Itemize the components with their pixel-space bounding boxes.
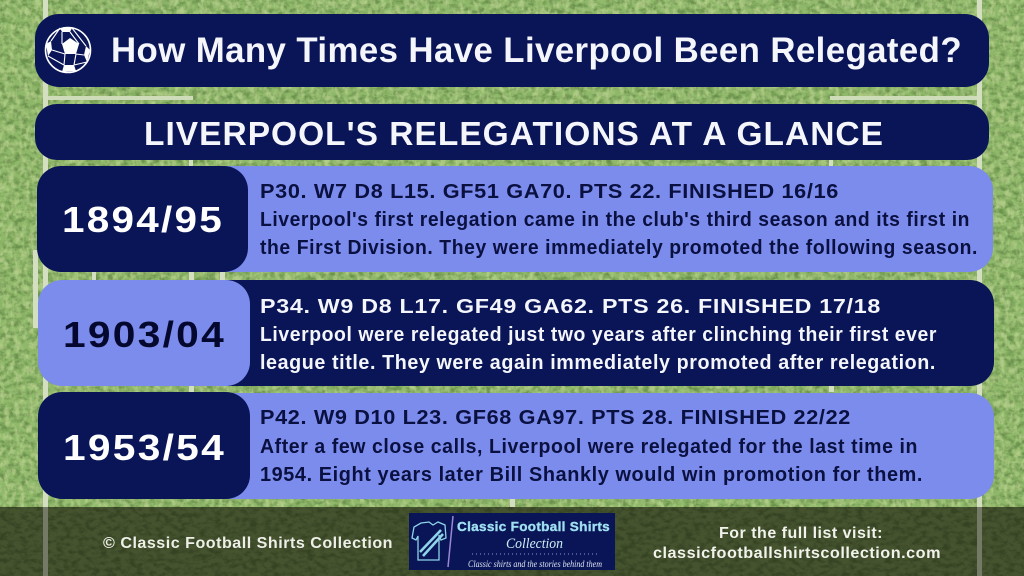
stats and description 1894/95: [260, 181, 978, 259]
stats and description 1894/95: the First Division. They were immediately promoted the following season.: [260, 237, 978, 259]
year box 1894/95: [37, 166, 248, 272]
call to action text: [653, 525, 941, 562]
subtitle text: LIVERPOOL'S RELEGATIONS AT A GLANCE: [144, 115, 884, 152]
stats and description 1903/04: Liverpool were relegated just two years after clinching their first ever: [260, 324, 937, 346]
stats and description 1903/04: league title. They were again immediately promoted after relegation.: [260, 352, 936, 374]
stats and description 1953/54: After a few close calls, Liverpool were relegated for the last time in: [260, 436, 918, 458]
row: 1894/95: [37, 166, 993, 272]
title banner: [35, 14, 989, 87]
year box 1953/54: 1953/54: [63, 427, 226, 468]
logo subtitle: Collection: [506, 536, 563, 552]
call to action text: For the full list visit:: [719, 525, 883, 542]
logo dotted rule: [472, 553, 600, 555]
year box 1953/54: [38, 392, 250, 499]
year box 1903/04: 1903/04: [63, 314, 226, 355]
stats and description 1903/04: [260, 296, 937, 374]
icon: shirt: [412, 522, 446, 560]
stats and description 1894/95: P30. W7 D8 L15. GF51 GA70. PTS 22. FINISHED 16/16: [260, 181, 839, 203]
year box 1894/95: 1894/95: [62, 199, 224, 240]
subtitle banner: [35, 104, 989, 160]
stats and description 1953/54: [260, 407, 923, 486]
stats and description 1953/54: 1954. Eight years later Bill Shankly would win promotion for them.: [260, 464, 923, 486]
logo divider: [448, 516, 453, 567]
stats and description 1903/04: P34. W9 D8 L17. GF49 GA62. PTS 26. FINISHED 17/18: [260, 296, 881, 318]
row: 1903/04: [38, 280, 994, 386]
call to action text: classicfootballshirtscollection.com: [653, 545, 941, 562]
title text: How Many Times Have Liverpool Been Relegated?: [111, 31, 962, 70]
logo wordmark: Classic Football Shirts: [457, 519, 610, 534]
footer band: [0, 507, 1024, 576]
stats and description 1894/95: Liverpool's first relegation came in the club's third season and its first in: [260, 209, 970, 231]
year box 1903/04: [38, 280, 250, 386]
logo: [409, 513, 615, 570]
row: 1953/54: [38, 392, 994, 499]
icon: football: [46, 28, 90, 72]
stats and description 1953/54: P42. W9 D10 L23. GF68 GA97. PTS 28. FINISHED 22/22: [260, 407, 851, 429]
copyright text: © Classic Football Shirts Collection: [103, 535, 393, 552]
logo tagline: Classic shirts and the stories behind them: [468, 560, 602, 570]
